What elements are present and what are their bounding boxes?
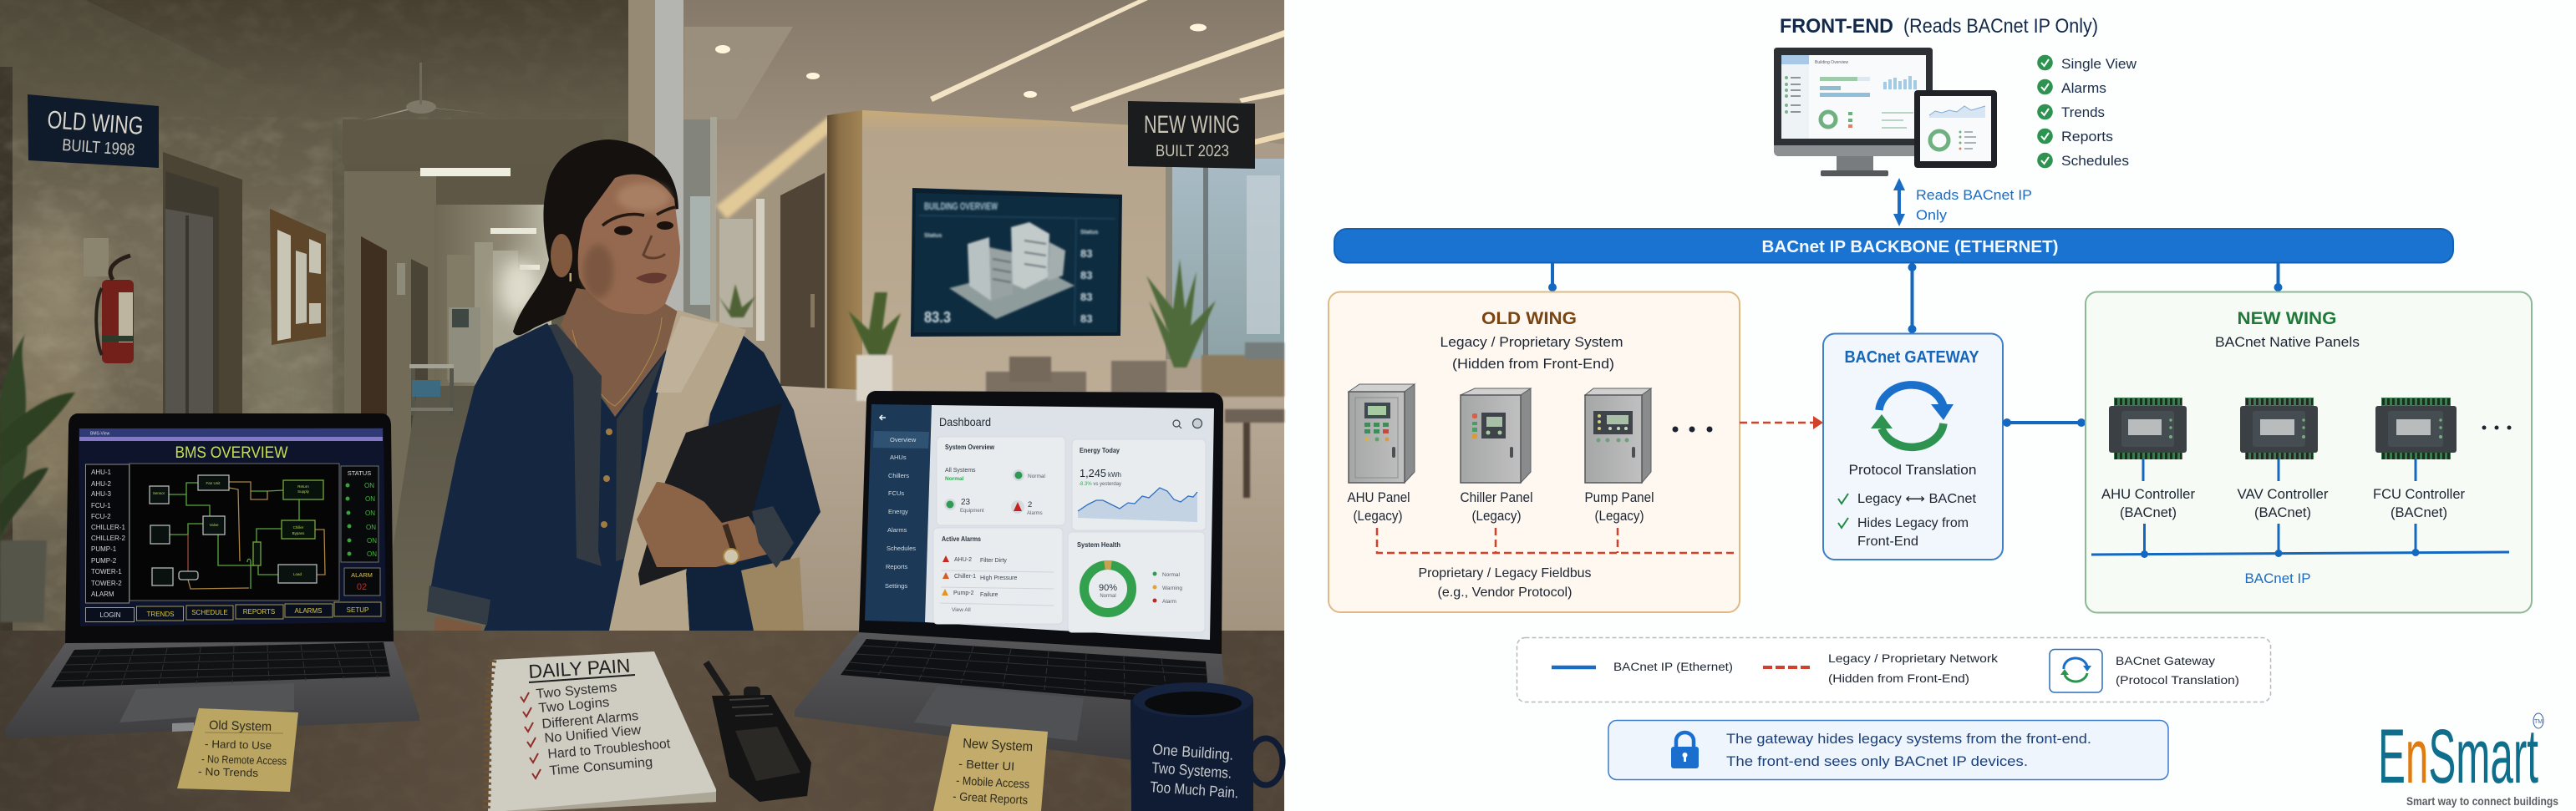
controller labels: VAV Controller [2238,487,2329,502]
legend: gateway label [2116,655,2239,687]
shawl [609,310,746,631]
wall screen: building overview [911,188,1122,337]
lid [859,391,1223,654]
card: energy today: -8.3% vs yesterday [1079,482,1121,487]
status panel: ON [367,537,377,545]
icon: FCU controller [2375,398,2457,459]
card: system overview: Alarms [1027,511,1043,516]
laptop: old BMS system: BMS-View [90,431,110,436]
card: energy today: kWh [1108,471,1121,479]
BACnet IP bus [2091,459,2509,558]
card: active alarms: View All [952,607,971,613]
card: system health [1068,532,1205,632]
base [5,641,419,738]
icon: walkie talkie [706,662,811,802]
card: system overview: System Overview [945,444,995,451]
donut chart [1085,565,1131,613]
notebook: daily pain: Time Consuming [549,755,653,778]
kurta torso and left arm [427,323,667,631]
equipment list: TOWER-2 [91,580,122,587]
checklist: front-end features: Reports [2061,129,2113,144]
gateway bullets: Legacy ⟷ BACnet [1857,492,1977,506]
icon: VAV controller [2240,398,2318,459]
schematic: Chiller [293,525,304,530]
icon: tablet [1914,90,1997,168]
panel labels: AHU Panel [1347,490,1410,505]
status panel: ON [366,524,376,531]
navigation buttons: ALARMS [295,607,322,615]
arrow: legacy network to gateway [1740,416,1823,429]
card: energy today: Energy Today [1080,447,1120,454]
icon: protocol translation cycle [1871,385,1954,447]
icon: padlock [1671,732,1699,768]
more controllers dots [2482,426,2512,429]
notebook: daily pain [486,651,716,811]
icon: fire extinguisher [96,256,134,363]
controller labels [2101,487,2465,520]
panel labels: (Legacy) [1472,509,1521,524]
sticky note: new system: - Better UI [958,757,1015,773]
callout text: The gateway hides legacy systems from the front-end. [1726,731,2091,747]
title bar [79,428,383,437]
panel: BACnet gateway: BACnet GATEWAY [1845,348,1979,367]
wall screen: building overview: 83 [1080,247,1092,260]
sleeve right [686,328,821,631]
controller labels: (BACnet) [2254,505,2311,520]
screen [79,428,386,626]
legend: gateway label: (Protocol Translation) [2116,674,2239,687]
legend: legacy network line [1763,652,1998,685]
wall screen: building overview: 83 [1080,269,1092,281]
legend: legacy network line: Legacy / Proprietary Network [1828,652,1998,665]
card: energy today: 1,245 [1080,467,1106,479]
new wing heading: NEW WING [2238,309,2336,328]
sign: new wing: BUILT 2023 [1156,143,1229,160]
icon: pump panel [1585,388,1651,483]
sticky note: old system: - No Remote Access [201,753,287,768]
navigation buttons: TRENDS [147,611,174,618]
card: active alarms: Filter Dirty [980,558,1007,564]
navigation buttons: SETUP [347,606,368,614]
panel labels: (Legacy) [1354,509,1402,524]
icon: lobby plants and sofas [719,259,1284,498]
card: active alarms: Chiller-1 [954,574,976,580]
sidebar menu: AHUs [890,454,907,461]
main screen [925,405,1214,640]
icon: desktop monitor [1774,48,1933,176]
sidebar menu: Reports [886,563,908,570]
face [578,175,680,314]
notebook: daily pain: Hard to Troubleshoot [547,737,671,762]
card: system overview: Equipment [960,509,984,514]
equipment list: PUMP-2 [91,557,117,565]
ceiling fan [364,109,483,120]
status panel: ON [364,482,374,489]
panel: BACnet gateway [1823,334,2003,560]
old wing heading [1440,309,1623,372]
status panel: STATUS [348,469,371,477]
equipment list: AHU-1 [91,469,112,476]
card: system overview [937,437,1065,525]
equipment list: AHU-3 [91,490,112,498]
arrow: reads BACnet IP only: Reads BACnet IP [1916,187,2032,203]
laptop: new system dashboard [795,391,1224,760]
title: front-end [1780,15,2098,38]
sticky note: new system [933,724,1048,811]
card: active alarms: Pump-2 [953,591,974,596]
checklist: front-end features [2037,55,2137,169]
sleeve cuff right [752,506,794,568]
legend: gateway label: BACnet Gateway [2116,655,2215,667]
title: front-end: FRONT-END [1780,15,1893,38]
logo: EnSmart: TM [2534,719,2543,725]
legend [1517,638,2271,702]
gateway bullets: Hides Legacy from [1857,516,1969,530]
icon: AHU panel [1349,384,1415,483]
sign: old wing: OLD WING [47,106,145,140]
panel: new wing [2086,292,2532,613]
equipment list: ALARM [91,591,114,598]
controller labels: (BACnet) [2120,505,2177,520]
legend: BACnet IP line: BACnet IP (Ethernet) [1613,661,1733,673]
sidebar menu: FCUs [888,489,904,497]
status panel [341,466,379,562]
panel: old wing [1329,292,1740,612]
notebook: daily pain: No Unified View [544,723,642,746]
bus label: BACnet IP [2244,570,2311,586]
person: facilities manager looking worried [427,139,821,631]
new wing heading [2215,309,2360,350]
mug: one building, two systems [1130,682,1283,811]
embroidery [549,324,602,566]
sticky note: old system: Old System [209,718,272,734]
status panel: ON [365,509,375,517]
callout: gateway hides legacy systems [1608,720,2168,780]
wall screen: building overview: 83 [1080,291,1092,303]
card: system overview: Normal [1028,474,1046,479]
navigation buttons: LOGIN [100,611,121,619]
old wing heading: Legacy / Proprietary System [1440,334,1623,350]
wall screen: building overview: Status [924,233,943,239]
hair [513,139,678,335]
backbone: BACnet IP Ethernet: BACnet IP BACKBONE (ETHERNET) [1761,238,2059,256]
wall screen: building overview: Status [1080,230,1098,236]
connectors from backbone [1548,263,2283,333]
status panel: ON [367,550,377,558]
sidebar menu [873,415,929,590]
sleeve cuff left [427,585,490,625]
sidebar menu: Settings [885,582,907,590]
schematic: Bypass [292,531,305,535]
equipment list: FCU-2 [91,513,111,520]
donut chart: 90% [1099,583,1117,593]
sticky note: old system: - No Trends [198,765,259,779]
callout text [1726,731,2091,769]
sticky note: new system: - Great Reports [953,789,1029,807]
equipment list: FCU-1 [91,502,111,509]
card: system health: System Health [1077,541,1120,549]
icons: search and user [1173,419,1202,428]
sign: new wing [1128,101,1255,169]
navigation buttons: SCHEDULE [191,609,228,616]
fieldbus label: (e.g., Vendor Protocol) [1437,585,1573,600]
equipment list: PUMP-1 [91,545,117,553]
watch [724,525,739,564]
status panel: ON [365,495,375,503]
photo: facility manager between old and new wings [0,0,1284,811]
chest and neck [561,288,678,417]
notebook: daily pain: Two Systems [536,681,617,702]
old wing corridor [0,0,656,635]
title: front-end: (Reads BACnet IP Only) [1903,15,2098,38]
card: system health: Warning [1162,585,1182,591]
hand and forearm [637,482,773,567]
equipment list: TOWER-1 [91,568,122,575]
card: active alarms: Active Alarms [942,535,981,543]
equipment list: CHILLER-1 [91,524,125,531]
dashboard heading: Dashboard [939,415,991,428]
checklist: front-end features: Alarms [2061,80,2106,96]
title: BMS OVERVIEW [175,444,288,462]
legacy fieldbus [1377,528,1736,553]
old wing heading: OLD WING [1481,309,1577,328]
card: energy today [1072,439,1206,530]
card: system health: Alarm [1162,599,1176,605]
cart and cabinet [449,307,480,383]
panel labels: (Legacy) [1594,509,1644,524]
connector: gateway to new wing [2003,418,2086,427]
folder [638,403,782,585]
icon: plant in old wing [0,334,75,622]
panel labels [1347,490,1654,524]
sticky note: new system: New System [963,737,1034,754]
card: active alarms [933,528,1063,624]
mug: one building, two systems: Too Much Pain. [1150,778,1239,801]
checklist: front-end features: Schedules [2061,153,2129,169]
alarm count [344,568,380,596]
callout text: The front-end sees only BACnet IP devices. [1726,753,2028,769]
new wing lobby [655,0,1284,631]
sidebar menu: Alarms [887,526,907,534]
diagram: BACnet architecture [1329,15,2558,808]
wall screen: building overview: 83 [1080,312,1092,325]
sidebar menu: Overview [890,436,917,444]
ceiling light lines [930,0,1148,102]
icon: chiller panel [1461,388,1531,483]
sign: new wing: NEW WING [1144,111,1240,139]
panel labels: Chiller Panel [1461,490,1532,505]
ear [551,234,572,277]
old corridor floor [393,386,486,631]
schematic: Fan Unit [206,481,221,485]
mug: one building, two systems: One Building. [1152,741,1234,763]
schematic: Valve [210,523,219,527]
schematic: Return [297,484,309,489]
card: system overview: 2 [1028,500,1032,509]
card: active alarms: AHU-2 [954,557,972,563]
sticky note: new system: - Mobile Access [956,773,1030,791]
wall screen: building overview: 83.3 [924,309,951,326]
alarm count: 02 [357,582,367,592]
sticky note: old system [177,708,298,792]
new wing heading: BACnet Native Panels [2215,334,2360,350]
navigation buttons: REPORTS [243,608,275,616]
card: system health: Normal [1162,572,1181,578]
more panels dots [1673,426,1713,433]
checklist: front-end features: Trends [2061,104,2105,120]
card: system overview: All Systems [945,468,976,474]
sign: old wing: BUILT 1998 [62,136,135,160]
sidebar [865,404,932,622]
sidebar menu: Schedules [887,545,916,552]
card: system overview: 23 [961,498,971,507]
equipment list: AHU-2 [91,480,112,488]
notebook: daily pain: Two Logins [538,696,610,716]
controller labels: AHU Controller [2101,487,2196,502]
donut chart: Normal [1100,594,1116,599]
equipment list [85,464,129,603]
controller labels: FCU Controller [2373,487,2465,502]
notebook: daily pain: Different Alarms [541,709,639,732]
sign: old wing [28,94,159,168]
desk surface [0,631,1284,811]
fieldbus label [1419,566,1591,600]
card: active alarms: High Pressure [980,575,1017,581]
icon: AHU controller [2109,398,2187,459]
arrow: reads BACnet IP only [1893,178,2032,226]
panel labels: Pump Panel [1584,490,1654,505]
controller labels: (BACnet) [2391,505,2447,520]
base [795,632,1224,760]
arrow: reads BACnet IP only: Only [1916,207,1948,223]
notebook: daily pain: DAILY PAIN [528,655,631,682]
equipment list: CHILLER-2 [91,535,125,542]
schematic: Load [293,572,302,576]
wall screen: building overview: BUILDING OVERVIEW [924,200,998,212]
schematic [130,464,339,601]
panel: BACnet gateway: Protocol Translation [1848,462,1977,478]
corridor depth [343,119,451,165]
buttons [601,428,612,528]
legend: legacy network line: (Hidden from Front-End) [1828,672,1969,685]
mug: one building, two systems: Two Systems. [1151,759,1232,782]
lid [65,413,394,645]
schematic: Supply [297,489,310,494]
column [628,0,656,393]
legend: gateway icon [2050,650,2102,692]
alarm count: ALARM [351,571,373,579]
gateway bullets: Front-End [1857,535,1918,549]
backbone: BACnet IP Ethernet [1334,229,2453,262]
laptop: old BMS system [5,413,419,738]
fieldbus label: Proprietary / Legacy Fieldbus [1419,566,1591,580]
old wing heading: (Hidden from Front-End) [1452,356,1614,372]
sidebar menu: Energy [888,508,908,515]
gateway bullets [1838,492,1977,549]
card: active alarms: Failure [980,592,998,598]
icon: desktop monitor: Building Overview [1815,60,1848,65]
navigation buttons [85,602,381,621]
schematic: Sensor [153,491,165,495]
sidebar menu: Chillers [888,472,909,479]
card: system overview: Normal [945,476,964,482]
sticky note: old system: - Hard to Use [205,738,272,752]
checklist: front-end features: Single View [2061,56,2137,72]
